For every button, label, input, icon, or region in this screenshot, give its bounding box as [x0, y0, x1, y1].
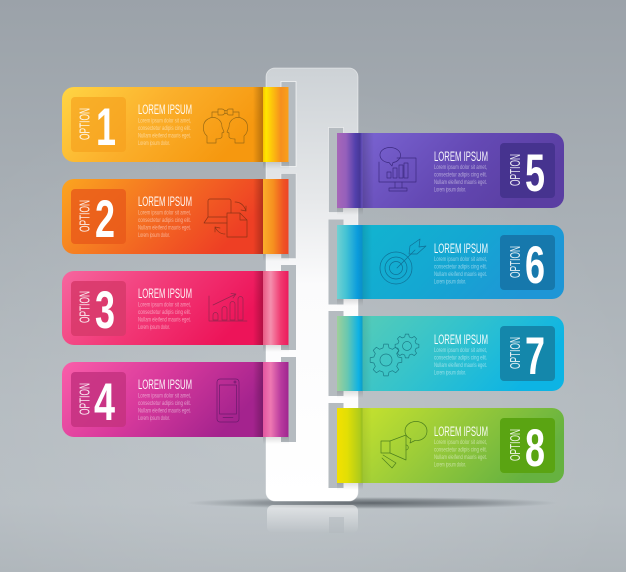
panel: option 1: 1	[96, 98, 116, 157]
board reflection	[267, 505, 358, 533]
panel: option 1: consectetur adipis cing elit.	[138, 125, 191, 132]
panel: option 6: Lorem ipsum dolor sit amet,	[434, 256, 487, 263]
icon: monitor with chart and speech bubble	[379, 148, 416, 191]
panel: option 2: consectetur adipis cing elit.	[138, 217, 191, 224]
panel: option 3: Lorem ipsum dolor sit amet,	[138, 302, 191, 308]
panel: option 4	[62, 362, 288, 437]
panel: option 8: LOREM IPSUM	[434, 424, 488, 439]
panel: option 6: 6	[525, 236, 545, 295]
panel: option 6: LOREM IPSUM	[434, 241, 488, 256]
panel: option 7: 7	[525, 327, 545, 386]
panel: option 3: 3	[95, 281, 115, 340]
panel: option 4: OPTION	[78, 383, 94, 415]
panel: option 2: Nullam eleifend mauris eget.	[138, 224, 191, 232]
panel: option 4: Nullam eleifend mauris eget.	[138, 408, 191, 414]
panel: option 2: OPTION	[78, 200, 94, 232]
floor shadow	[186, 497, 558, 509]
panel: option 8: Lorem ipsum dolor.	[434, 462, 466, 468]
panel: option 1: OPTION	[78, 108, 94, 140]
panel: option 7: LOREM IPSUM	[434, 332, 488, 347]
panel: option 3: LOREM IPSUM	[138, 286, 192, 301]
panel: option 6: Lorem ipsum dolor.	[434, 278, 466, 286]
panel: option 2: Lorem ipsum dolor sit amet,	[138, 210, 191, 216]
central board with slots	[263, 68, 363, 501]
panel: option 7	[337, 316, 564, 391]
panel: option 5: OPTION	[508, 154, 524, 186]
panel: option 5: 5	[525, 144, 545, 203]
panel: option 1: Lorem ipsum dolor.	[138, 140, 170, 147]
panel: option 8: OPTION	[508, 429, 524, 461]
panel: option 5: consectetur adipis cing elit.	[434, 172, 487, 178]
icon: target with arrow	[380, 239, 426, 284]
panel: option 3: Lorem ipsum dolor.	[138, 324, 170, 331]
panel: option 7: Lorem ipsum dolor sit amet,	[434, 347, 487, 354]
panel: option 4: LOREM IPSUM	[138, 377, 192, 392]
panel: option 6: consectetur adipis cing elit.	[434, 264, 487, 270]
panel: option 1	[62, 87, 288, 162]
icon: laptop and document	[204, 199, 247, 237]
icon: gears	[370, 334, 419, 376]
icon: smartphone	[217, 379, 239, 422]
panel: option 7: Nullam eleifend mauris eget.	[434, 362, 487, 369]
panel: option 4: Lorem ipsum dolor sit amet,	[138, 392, 191, 400]
panel: option 3: OPTION	[78, 291, 94, 323]
panel: option 4: consectetur adipis cing elit.	[138, 400, 191, 407]
icon: heads with plug	[203, 109, 248, 143]
panel: option 3: Nullam eleifend mauris eget.	[138, 316, 191, 324]
panel: option 4: 4	[94, 373, 115, 432]
panel: option 5	[337, 133, 564, 208]
icon: bar chart	[209, 294, 247, 321]
panel: option 4: Lorem ipsum dolor.	[138, 415, 170, 422]
panel: option 8: Nullam eleifend mauris eget.	[434, 454, 487, 461]
panel: option 2: Lorem ipsum dolor.	[138, 232, 170, 239]
panel: option 8: 8	[525, 419, 545, 478]
panel: option 5: Nullam eleifend mauris eget.	[434, 179, 487, 186]
panel: option 8: Lorem ipsum dolor sit amet,	[434, 439, 487, 446]
panel: option 5: LOREM IPSUM	[434, 149, 488, 164]
panel: option 6	[337, 225, 564, 299]
panel: option 6: Nullam eleifend mauris eget.	[434, 271, 487, 278]
panel: option 7: Lorem ipsum dolor.	[434, 370, 466, 376]
panel: option 3	[62, 271, 288, 345]
panel: option 1: LOREM IPSUM	[138, 102, 192, 117]
panel: option 7: OPTION	[508, 337, 524, 369]
panel: option 8: consectetur adipis cing elit.	[434, 446, 487, 454]
panel: option 2: LOREM IPSUM	[138, 194, 192, 209]
panel: option 5: Lorem ipsum dolor sit amet,	[434, 164, 487, 171]
panel: option 1: Nullam eleifend mauris eget.	[138, 132, 191, 140]
panel: option 1: Lorem ipsum dolor sit amet,	[138, 118, 191, 124]
panel: option 8	[337, 408, 564, 483]
panel: option 2	[62, 179, 288, 254]
panel: option 2: 2	[95, 190, 115, 249]
panel: option 7: consectetur adipis cing elit.	[434, 354, 487, 362]
panel: option 6: OPTION	[508, 246, 524, 278]
panel: option 5: Lorem ipsum dolor.	[434, 186, 466, 194]
icon: megaphone with speech bubble	[381, 422, 427, 468]
panel: option 3: consectetur adipis cing elit.	[138, 309, 191, 316]
